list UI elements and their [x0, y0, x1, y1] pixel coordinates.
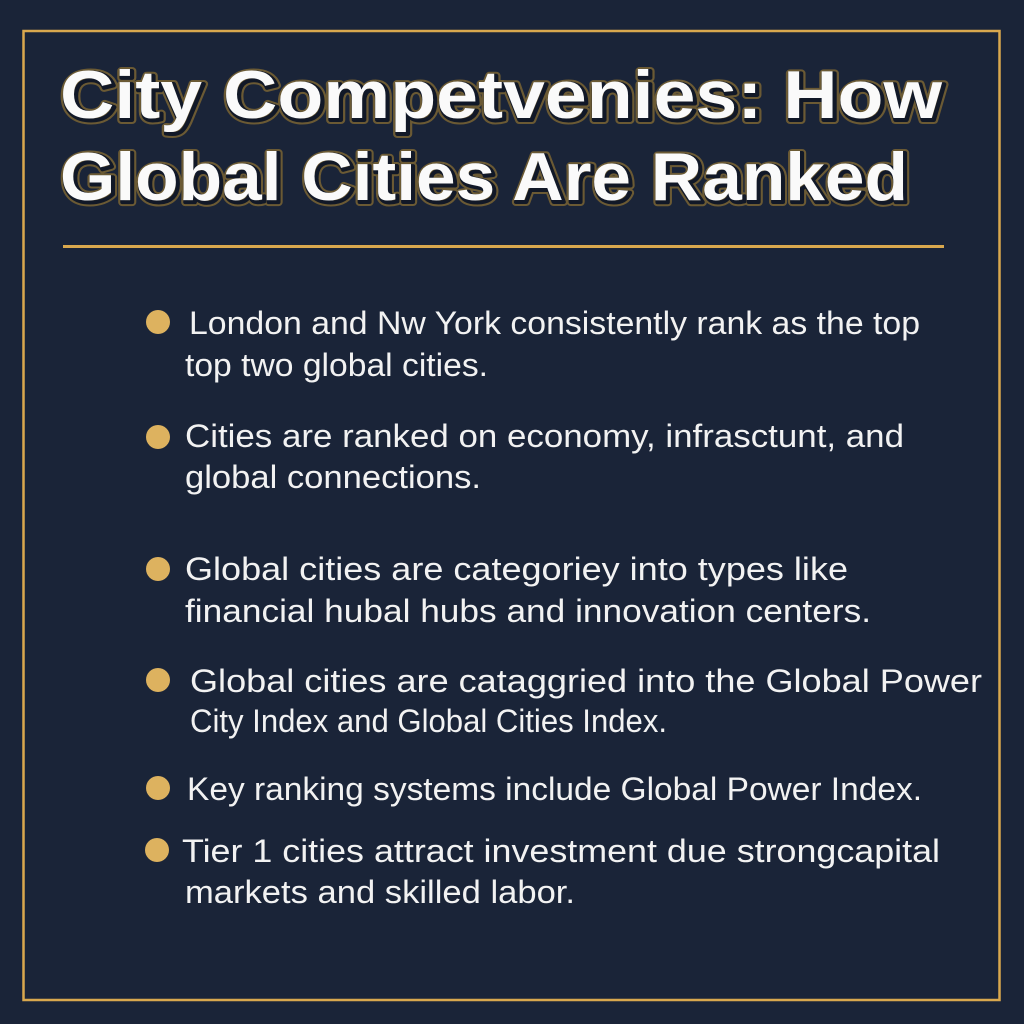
bullet 3: financial hubal hubs and innovation centers. — [185, 593, 871, 629]
title: Global Cities Are Ranked — [62, 141, 910, 217]
bullet 3 — [146, 551, 871, 629]
title: Global Cities Are Ranked — [62, 141, 910, 217]
bullet 4 — [146, 663, 982, 739]
bullet 6: markets and skilled labor. — [185, 874, 575, 910]
bullet 1: London and Nw York consistently rank as the top — [189, 305, 920, 341]
bullet 5: Key ranking systems include Global Power Index. — [187, 771, 922, 807]
title: City Competvenies: How — [62, 59, 945, 135]
bullet 2 — [146, 418, 904, 495]
bullet 1 — [146, 305, 920, 383]
bullet 2: Cities are ranked on economy, infrasctunt, and — [185, 418, 904, 454]
bullet list — [145, 305, 982, 910]
title: Global Cities Are Ranked — [60, 139, 908, 215]
bullet 6: Tier 1 cities attract investment due strongcapital — [182, 833, 940, 869]
bullet 4: Global cities are cataggried into the Global Power — [190, 663, 982, 699]
bullet 3: Global cities are categoriey into types like — [185, 551, 848, 587]
bullet 6 — [145, 833, 940, 910]
title: City Competvenies: How — [60, 57, 943, 133]
bullet 1: top two global cities. — [185, 347, 488, 383]
title — [60, 57, 945, 217]
bullet 2: global connections. — [185, 459, 481, 495]
title: City Competvenies: How — [62, 59, 945, 135]
bullet 4: City Index and Global Cities Index. — [190, 703, 667, 739]
